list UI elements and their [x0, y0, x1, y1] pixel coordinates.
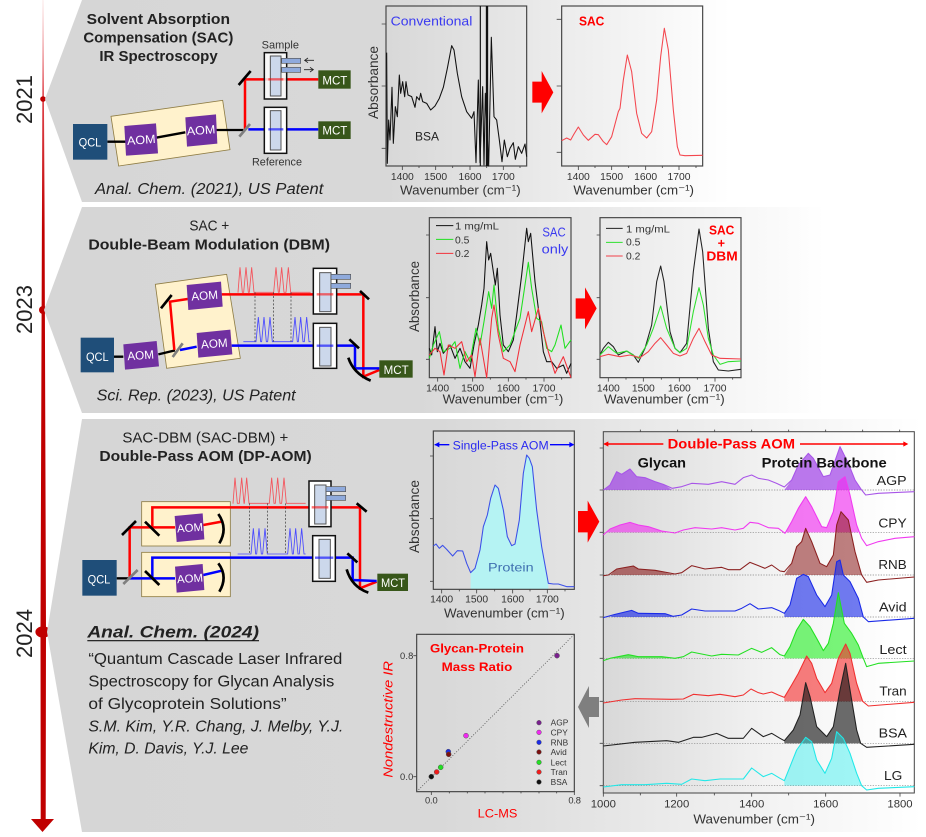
heading: SAC-DBM + Double-Pass AOM: Double-Pass AOM (DP-AOM) [99, 449, 312, 465]
axis label: LC-MS: LC-MS [478, 806, 517, 820]
label: SAC + DBM: + [718, 237, 725, 251]
label: single-pass AOM with arrows: Single-Pass AOM [453, 438, 549, 452]
citation heading: Anal. Chem. (2024): Anal. Chem. (2024) [86, 622, 260, 641]
panel: 2024 double-pass AOM [47, 419, 922, 832]
traces: AGP CPY RNB Avid: RNB [878, 557, 907, 572]
chart: SAC + DBM concentration series: 1600 [668, 384, 691, 395]
chart: SAC spectrum: 1500 [600, 172, 623, 183]
legend: SAC only: 1 mg/mL [455, 221, 499, 232]
diagram: DP-AOM optical setup: AOM [177, 572, 203, 586]
panel: 2023 double-beam modulation [44, 207, 825, 413]
traces: Lect Tran BSA LG: 1600 [813, 798, 838, 810]
legend: samples [537, 718, 569, 787]
axis label: Nondestructive IR: Nondestructive IR [381, 661, 395, 778]
chart: glycan-protein mass ratio scatter: 0.8 [400, 651, 413, 661]
chart: conventional BSA spectrum [382, 6, 527, 197]
diagram: SAC optical setup: QCL [79, 136, 102, 150]
arrow: conventional to SAC [532, 71, 553, 113]
label: Glycan: Glycan [638, 454, 686, 470]
chart: glycan-protein mass ratio scatter: 0.8 [568, 795, 581, 805]
label: SAC + DBM [706, 223, 738, 264]
diagram: SAC optical setup: MCT [322, 124, 348, 138]
traces: Lect Tran BSA LG: 1400 [739, 798, 764, 810]
heading: Double-Pass AOM with arrows: Double-Pass AOM [668, 435, 795, 451]
year label 2021: 2021 [12, 75, 37, 124]
traces: Lect Tran BSA LG: Lect [879, 642, 907, 657]
chart: SAC only concentration series: 1500 [461, 384, 484, 395]
traces: Lect Tran BSA LG: Tran [879, 684, 907, 699]
chart: SAC spectrum: SAC [579, 15, 604, 29]
label: SAC + DBM: SAC [709, 223, 734, 237]
heading: SAC + Double-Beam Modulation [88, 219, 330, 253]
authors: S.M. Kim, Y.R. Chang, J. Melby, Y.J. [88, 718, 343, 735]
chart: SAC + DBM concentration series: Wavenumber (cm⁻¹) [604, 391, 725, 406]
chart: conventional BSA spectrum: 1600 [459, 172, 482, 183]
chart: single-pass AOM spectrum: 1600 [501, 595, 524, 606]
chart: single-pass AOM spectrum: Protein [488, 561, 534, 575]
heading: SAC-DBM + Double-Pass AOM [99, 431, 312, 465]
paper title [88, 651, 342, 713]
heading: Double-Pass AOM with arrows [603, 435, 908, 451]
chart: glycan-protein mass ratio scatter: 0.0 [425, 795, 438, 805]
arrow: single-pass to double-pass [578, 501, 599, 543]
traces: AGP CPY RNB Avid: Avid [879, 600, 907, 615]
diagram: DP-AOM optical setup: QCL [88, 572, 111, 586]
legend: SAC only: 0.2 [455, 249, 470, 260]
chart: SAC only concentration series: SAC [542, 226, 566, 240]
chart: SAC + DBM concentration series: 1500 [632, 384, 655, 395]
traces: Lect Tran BSA LG: 1200 [664, 798, 689, 810]
chart: conventional BSA spectrum: BSA [415, 130, 440, 144]
traces: Lect Tran BSA LG: 1800 [887, 798, 913, 810]
traces: AGP CPY RNB Avid [600, 430, 914, 622]
diagram: DBM optical setup: AOM [191, 288, 218, 304]
Avid [603, 560, 914, 622]
arrow: SAC only to SAC+DBM [576, 287, 597, 329]
chart: conventional BSA spectrum: Conventional [391, 15, 472, 29]
chart: SAC spectrum: 1600 [634, 172, 657, 183]
chart: single-pass AOM spectrum: 1500 [465, 595, 488, 606]
axis label absorbance 2024: Absorbance [406, 480, 422, 553]
traces: Lect Tran BSA LG: 1000 [591, 798, 616, 810]
citation 2023: Sci. Rep. (2023), US Patent [97, 388, 296, 405]
diagram: DBM optical setup [81, 219, 413, 381]
chart: SAC + DBM concentration series [597, 218, 741, 406]
legend: samples: Avid [551, 747, 567, 757]
chart: glycan-protein mass ratio scatter: 0.0 [400, 772, 413, 782]
traces: Lect Tran BSA LG: BSA [879, 726, 907, 741]
diagram: DBM optical setup: MCT [384, 363, 409, 377]
chart: SAC only concentration series: only [542, 243, 569, 257]
legend: samples: CPY [551, 727, 568, 737]
chart: conventional BSA spectrum: 1500 [424, 172, 447, 183]
chart title: glycan-protein mass ratio: Glycan-Protein [430, 642, 524, 656]
citation 2021: Anal. Chem. (2021), US Patent [94, 181, 324, 198]
diagram: SAC optical setup: MCT [322, 73, 348, 87]
chart: double-pass AOM stacked spectra [591, 430, 914, 826]
label: Protein Backbone: Protein Backbone [762, 454, 887, 470]
chart: SAC only concentration series: 1400 [426, 384, 449, 395]
RNB [603, 512, 914, 582]
chart: SAC only concentration series [426, 218, 571, 406]
chart: SAC spectrum: 1700 [668, 172, 691, 183]
diagram: DBM optical setup: AOM [127, 347, 154, 363]
CPY [603, 477, 914, 546]
chart: conventional BSA spectrum: 1700 [492, 172, 515, 183]
chart title: glycan-protein mass ratio: Mass Ratio [442, 660, 513, 674]
heading: SAC-DBM + Double-Pass AOM: SAC-DBM (SAC-DBM) + [122, 431, 288, 447]
traces: AGP CPY RNB Avid: CPY [878, 515, 907, 530]
arrow: double-pass to scatter plot [578, 686, 599, 728]
year label 2023: 2023 [12, 285, 37, 334]
chart: SAC spectrum: Wavenumber (cm⁻¹) [573, 182, 694, 197]
legend: SAC + DBM: 0.2 [626, 252, 641, 263]
legend: SAC + DBM [606, 224, 670, 263]
panel: 2021 SAC IR spectroscopy [45, 0, 730, 202]
chart: single-pass AOM spectrum [430, 431, 574, 620]
diagram: SAC optical setup: Sample [262, 39, 299, 51]
heading: Solvent Absorption Compensation: Solvent Absorption [87, 11, 230, 28]
diagram: SAC optical setup: AOM [186, 122, 216, 138]
legend: samples: Lect [551, 757, 567, 767]
paper title: Spectroscopy for Glycan Analysis [88, 674, 335, 691]
legend: samples: RNB [551, 737, 569, 747]
legend: samples: Tran [551, 767, 568, 777]
AGP [603, 447, 914, 495]
legend: SAC + DBM: 1 mg/mL [626, 224, 670, 235]
Lect [603, 593, 914, 667]
traces: Lect Tran BSA LG [591, 593, 914, 826]
paper title: “Quantum Cascade Laser Infrared [88, 651, 342, 668]
label: single-pass AOM with arrows [434, 438, 574, 452]
authors [88, 718, 343, 757]
diagram: DP-AOM optical setup: MCT [381, 576, 406, 590]
publication block [86, 622, 343, 757]
legend: SAC only: 0.5 [455, 235, 470, 246]
chart: glycan-protein mass ratio scatter [381, 634, 581, 820]
chart: SAC only concentration series: 1700 [533, 384, 556, 395]
chart: SAC only concentration series: Wavenumber (cm⁻¹) [443, 391, 563, 406]
authors: Kim, D. Davis, Y.J. Lee [88, 740, 248, 757]
axis label absorbance 2023: Absorbance [406, 261, 422, 332]
Tran [603, 644, 914, 706]
chart: SAC spectrum [557, 6, 703, 197]
chart: conventional BSA spectrum: Wavenumber (cm⁻¹) [400, 182, 521, 197]
chart title: glycan-protein mass ratio [430, 642, 524, 674]
heading: Solvent Absorption Compensation: Compensation (SAC) [83, 30, 233, 47]
heading: SAC + Double-Beam Modulation: SAC + [189, 219, 229, 235]
label: SAC + DBM: DBM [706, 250, 738, 264]
legend: SAC + DBM: 0.5 [626, 238, 641, 249]
diagram: DBM optical setup: QCL [86, 350, 109, 364]
traces: Lect Tran BSA LG: LG [884, 768, 902, 783]
chart: single-pass AOM spectrum: 1700 [536, 595, 559, 606]
chart: SAC spectrum: 1400 [567, 172, 590, 183]
legend: samples: BSA [551, 777, 568, 787]
chart: SAC + DBM concentration series: 1400 [597, 384, 620, 395]
timeline arrow [31, 0, 54, 832]
chart: conventional BSA spectrum: 1400 [391, 172, 414, 183]
diagram: DP-AOM optical setup: AOM [177, 522, 203, 536]
heading: Solvent Absorption Compensation: IR Spectroscopy [99, 48, 218, 65]
diagram: SAC optical setup: Reference [252, 157, 302, 169]
heading: SAC + Double-Beam Modulation: Double-Beam Modulation (DBM) [88, 237, 330, 253]
chart: single-pass AOM spectrum: 1400 [430, 595, 453, 606]
LG [603, 732, 914, 790]
chart: SAC only concentration series: 1600 [497, 384, 520, 395]
legend: samples: AGP [551, 718, 569, 728]
diagram: DBM optical setup: AOM [201, 336, 228, 352]
chart: SAC + DBM concentration series: 1700 [704, 384, 727, 395]
diagram: SAC optical setup: AOM [127, 132, 156, 148]
BSA [603, 663, 914, 747]
diagram: SAC optical setup [73, 11, 351, 169]
traces: AGP CPY RNB Avid: AGP [877, 473, 907, 488]
axis label absorbance 2021: Absorbance [365, 46, 381, 119]
chart: single-pass AOM spectrum: Wavenumber (cm⁻¹) [444, 605, 565, 620]
paper title: of Glycoprotein Solutions” [88, 696, 287, 713]
legend: SAC only [436, 221, 499, 260]
diagram: DP-AOM optical setup [82, 431, 408, 597]
heading: Solvent Absorption Compensation [83, 11, 233, 65]
year label 2024: 2024 [12, 609, 37, 658]
data points [429, 653, 559, 779]
traces: Lect Tran BSA LG: Wavenumber (cm⁻¹) [693, 811, 815, 826]
